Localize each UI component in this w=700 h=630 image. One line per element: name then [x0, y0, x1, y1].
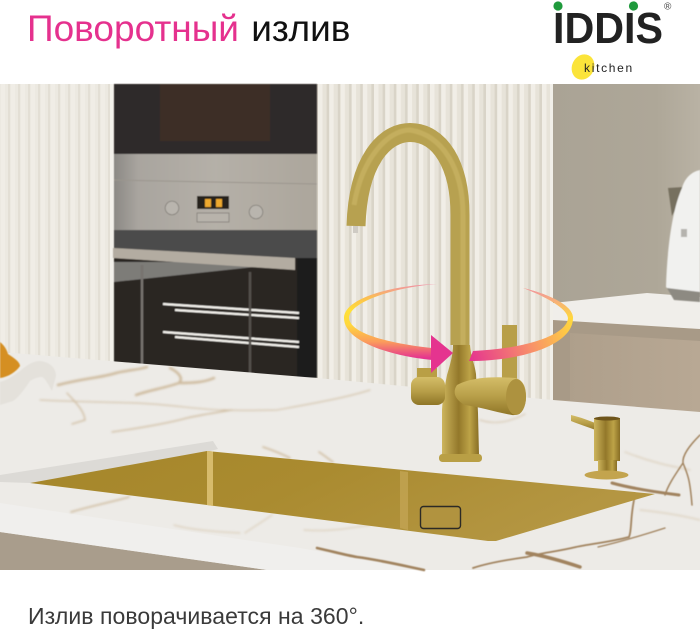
oven handle: [113, 248, 295, 270]
oven racks: [163, 304, 299, 347]
kettle: [666, 170, 700, 302]
sink lip: [0, 441, 218, 483]
rotation arrows: [344, 284, 573, 373]
oven knobs: [165, 201, 179, 215]
right lever: [502, 325, 517, 381]
logo: IDDIS kitchen: [553, 1, 672, 83]
faucet gooseneck: [356, 132, 460, 345]
marble veins: [40, 367, 700, 533]
right arc with arrowhead: [469, 288, 573, 361]
logo: IDDIS kitchen: ®: [664, 2, 672, 12]
dark marble veins: [317, 435, 700, 570]
soap dispenser: [571, 415, 628, 480]
bowl and fruit: [0, 342, 56, 405]
right cylinder: [455, 377, 526, 415]
faucet body: [442, 345, 479, 455]
kettle handle: [668, 187, 684, 216]
title: Поворотный излив: [27, 8, 350, 49]
wall right: [553, 84, 700, 309]
oven display: [197, 196, 229, 209]
wood cabinet: [553, 318, 700, 418]
logo: IDDIS kitchen: kitchen: [584, 61, 634, 75]
left fluted panel: [0, 84, 111, 374]
wood front: [0, 532, 267, 570]
sink reflections: [207, 451, 213, 506]
faucet base: [439, 454, 482, 462]
kitchen photo: [0, 84, 700, 570]
brand name: IDDIS: [553, 4, 663, 53]
marble countertop: [0, 353, 700, 570]
left arc with arrowhead: [344, 284, 453, 373]
oven: [113, 84, 317, 378]
spout tip: [353, 226, 358, 233]
left handle: [417, 368, 437, 379]
caption: Излив поворачивается на 360°.: [28, 603, 364, 629]
counter front band: [0, 503, 420, 570]
sink drain: [420, 506, 460, 528]
side counter: [553, 293, 700, 329]
right fluted panel: [317, 84, 553, 404]
sink basin: [30, 451, 655, 541]
faucet: [353, 130, 526, 462]
